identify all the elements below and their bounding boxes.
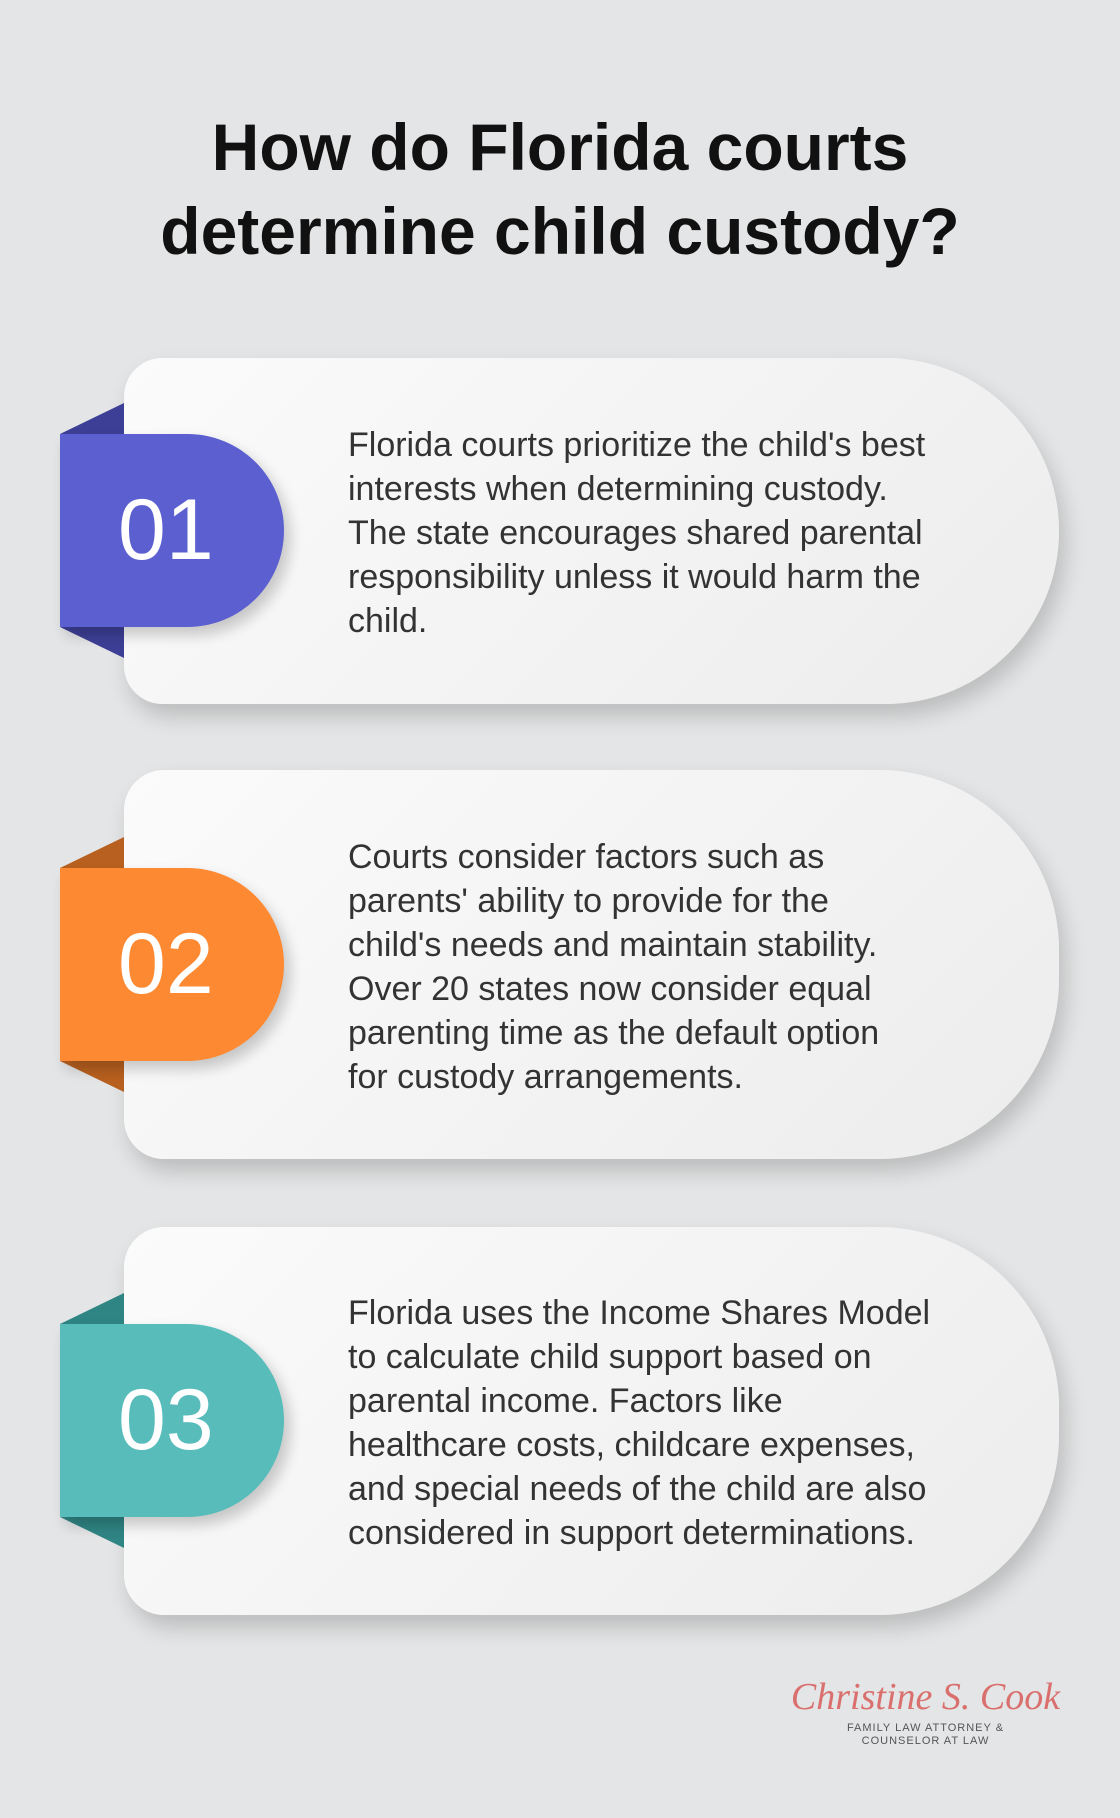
text 3: Florida uses the Income Shares Model (348, 1294, 930, 1332)
fold: card 2 bottom (60, 1061, 124, 1092)
text 2: parents' ability to provide for the (348, 882, 829, 920)
title: determine child custody? (160, 194, 960, 268)
text 2: parenting time as the default option (348, 1014, 879, 1052)
badge 01 (60, 434, 284, 627)
badge 02: 02 (118, 916, 214, 1012)
text 3: to calculate child support based on (348, 1338, 872, 1376)
text 2: child's needs and maintain stability. (348, 926, 877, 964)
text 1 (348, 426, 925, 640)
text 2: Courts consider factors such as (348, 838, 824, 876)
panel: card 1 (124, 358, 1059, 704)
fold: card 3 top (60, 1293, 124, 1324)
text 1: responsibility unless it would harm the (348, 558, 921, 596)
text 1: interests when determining custody. (348, 470, 888, 508)
fold: card 1 top (60, 403, 124, 434)
text 3: parental income. Factors like (348, 1382, 783, 1420)
badge 03 (60, 1324, 284, 1517)
text 3: considered in support determinations. (348, 1514, 915, 1552)
logo: COUNSELOR AT LAW (862, 1735, 989, 1747)
fold: card 2 top (60, 837, 124, 868)
text 1: The state encourages shared parental (348, 514, 923, 552)
badge 03: 03 (118, 1372, 214, 1468)
text 2 (348, 838, 879, 1096)
logo (791, 1676, 1061, 1747)
text 2: Over 20 states now consider equal (348, 970, 872, 1008)
logo: FAMILY LAW ATTORNEY & (847, 1722, 1004, 1734)
text 3: and special needs of the child are also (348, 1470, 926, 1508)
badge 02 (60, 868, 284, 1061)
title (160, 110, 960, 268)
title: How do Florida courts (212, 110, 908, 184)
text 3: healthcare costs, childcare expenses, (348, 1426, 915, 1464)
fold: card 3 bottom (60, 1517, 124, 1548)
fold: card 1 bottom (60, 627, 124, 658)
text 1: Florida courts prioritize the child's best (348, 426, 925, 464)
text 3 (348, 1294, 930, 1552)
panel: card 2 (124, 770, 1059, 1159)
text 2: for custody arrangements. (348, 1058, 743, 1096)
logo: Christine S. Cook (791, 1676, 1060, 1718)
text 1: child. (348, 602, 427, 640)
badge 01: 01 (118, 482, 214, 578)
panel: card 3 (124, 1227, 1059, 1615)
